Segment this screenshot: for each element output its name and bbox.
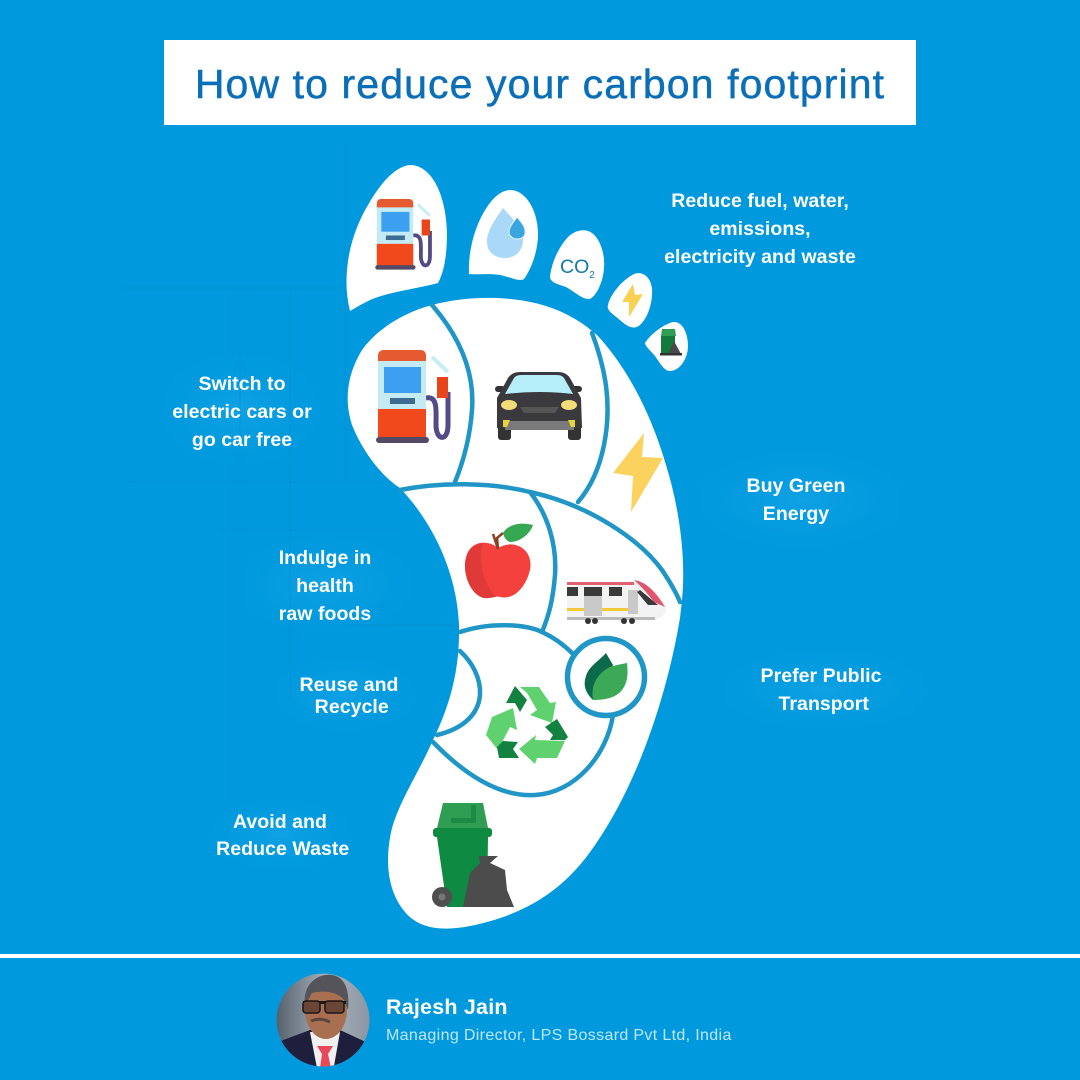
- icon: CO2: CO: [560, 256, 589, 278]
- title: How to reduce your carbon footprint: [195, 61, 885, 107]
- label: avoid waste: Reduce Waste: [216, 838, 349, 860]
- label: avoid waste: Avoid and: [233, 811, 327, 833]
- author role: Managing Director, LPS Bossard Pvt Ltd, India: [386, 1027, 732, 1044]
- footer rule: [0, 954, 1080, 958]
- label: public transport: [761, 665, 881, 715]
- icon: train: [567, 580, 666, 624]
- label: toes: Reduce fuel, water,: [671, 190, 849, 212]
- label: public transport: Prefer Public: [761, 665, 881, 687]
- icon: small fuel pump: [375, 199, 430, 270]
- label: toes: [664, 190, 856, 268]
- label: public transport: Transport: [779, 693, 869, 715]
- title: [164, 40, 916, 125]
- foot sole: [348, 298, 683, 929]
- toe 4: [608, 273, 652, 328]
- icon: water drops: [487, 208, 525, 258]
- toe 5: [645, 322, 688, 371]
- label: toes: emissions,: [709, 218, 811, 240]
- icon: small bolt: [622, 284, 643, 317]
- toe 3: [550, 230, 604, 299]
- toe 1: [346, 165, 447, 311]
- label: green energy: Energy: [763, 503, 829, 525]
- author name: Rajesh Jain: [386, 995, 508, 1019]
- label: avoid waste: [216, 811, 349, 860]
- icon: apple: [465, 524, 533, 598]
- label: electric cars: Switch to: [198, 373, 286, 395]
- label: reuse and recycle: Recycle: [315, 696, 389, 718]
- label: green energy: Buy Green: [746, 475, 846, 497]
- icon: large lightning bolt: [613, 433, 663, 512]
- icon: car: [495, 372, 582, 440]
- label: raw foods: health: [296, 575, 354, 597]
- label: raw foods: [279, 547, 371, 625]
- toes: [346, 165, 688, 371]
- icon: waste bin and bag: [432, 803, 514, 907]
- label: toes: electricity and waste: [664, 246, 856, 268]
- icon: CO2: 2: [589, 270, 595, 281]
- icon: recycle: [486, 686, 568, 764]
- toe 2: [469, 190, 538, 280]
- icon: leaf badge: [568, 638, 644, 716]
- sole dividers: [400, 305, 680, 795]
- label: electric cars: electric cars or: [172, 401, 312, 423]
- icon: big fuel pump: [376, 350, 448, 443]
- icon: small bin: [660, 329, 682, 356]
- label: reuse and recycle: [299, 674, 399, 718]
- label: electric cars: go car free: [192, 429, 292, 451]
- label: green energy: [746, 475, 846, 525]
- label: reuse and recycle: Reuse and: [299, 674, 399, 696]
- label: raw foods: raw foods: [279, 603, 371, 625]
- label: raw foods: Indulge in: [279, 547, 371, 569]
- portrait: [276, 973, 370, 1070]
- label: electric cars: [172, 373, 312, 451]
